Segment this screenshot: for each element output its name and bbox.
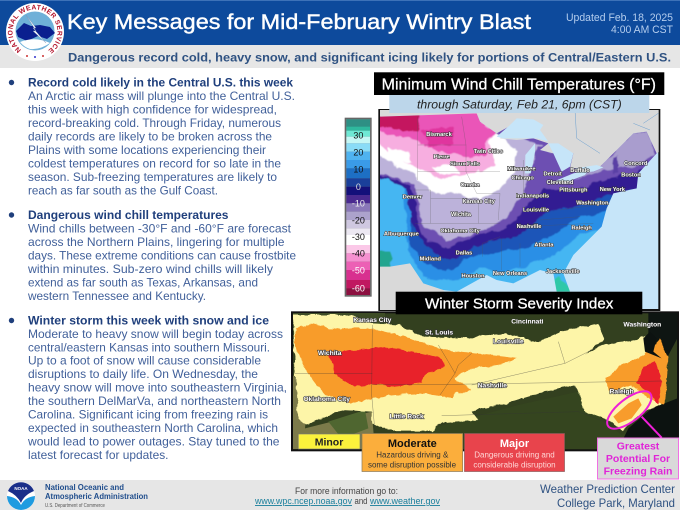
callout: greatest potential for freezing rain: Greatest — [617, 440, 660, 452]
city labels: Little Rock — [390, 413, 424, 420]
city labels: Wichita — [318, 350, 342, 357]
wind chill colour legend: -40 — [352, 249, 365, 259]
NOAA name — [45, 482, 148, 509]
more information links: For more information go to: — [295, 486, 398, 496]
legend: moderate: some disruption possible — [368, 460, 457, 470]
city labels: Chicago — [512, 176, 534, 182]
wind chill colour legend: -60 — [352, 284, 365, 294]
text block: winter storm: latest forecast for updates. — [28, 448, 168, 462]
city labels: Cleveland — [547, 180, 574, 186]
city labels: Houston — [462, 274, 485, 280]
text block: record cold: reach as far south as the Gulf Coast. — [28, 183, 218, 197]
city labels: New Orleans — [493, 271, 527, 277]
city labels: Wichita — [451, 212, 472, 218]
city labels: Dallas — [456, 251, 472, 257]
mexico land — [380, 264, 444, 310]
city labels: Washington — [623, 322, 661, 329]
legend: moderate — [362, 434, 463, 472]
text block: winter storm: would lead to power outages. Stay tuned to the — [27, 434, 280, 448]
text block: wind chill: across the Northern Plains, lingering for multiple — [28, 235, 285, 249]
city labels: Louisville — [523, 207, 549, 213]
wind chill colour legend: -30 — [352, 232, 365, 242]
text block: wind chill: western Tennessee and Kentucky. — [27, 289, 206, 303]
title: Key Messages for Mid-February Wintry Blast — [67, 11, 531, 34]
city labels: Milwaukee — [507, 166, 535, 172]
text block: winter storm: Winter storm this week with snow and ice — [28, 313, 269, 327]
legend: major: Dangerous driving and — [474, 450, 555, 460]
legend: minor: Minor — [315, 436, 343, 448]
city labels: Boston — [621, 173, 641, 179]
text block: winter storm: Up to a foot of snow will cause considerable — [28, 354, 261, 368]
legend: moderate: Moderate — [388, 438, 437, 450]
text block: winter storm: Moderate to heavy snow will begin today across — [28, 327, 283, 341]
NOAA name: National Oceanic and — [45, 482, 124, 492]
icon: NOAA logo — [7, 482, 35, 510]
subtitle band — [0, 45, 680, 68]
city labels: Louisville — [493, 339, 524, 346]
city labels: Midland — [420, 257, 442, 263]
wind chill colour legend: 10 — [353, 165, 363, 175]
text block: wind chill: days. These extreme conditions can cause frostbite — [28, 248, 296, 262]
more information links: www.wpc.ncep.noaa.gov — [254, 496, 352, 506]
text block: record cold — [9, 76, 295, 197]
city labels: Raleigh — [571, 225, 592, 231]
city labels: New York — [600, 187, 626, 193]
major severity area — [328, 347, 662, 405]
text block: record cold: this week with high confidence for widespread, — [28, 103, 277, 117]
terrain — [293, 313, 385, 335]
canada land — [379, 110, 659, 168]
text block: winter storm — [9, 313, 287, 462]
NOAA name: U.S. Department of Commerce — [45, 503, 105, 509]
legend: major: Major — [500, 438, 530, 450]
city labels: Nashville — [517, 224, 541, 230]
wind chill colour legend — [345, 118, 371, 296]
legend: moderate: Hazardous driving & — [376, 450, 449, 460]
temperature bands — [380, 114, 656, 292]
legend: major — [464, 434, 564, 472]
text block: winter storm: heavy snow will move into southeastern Virginia, — [28, 381, 287, 395]
legend: minor — [298, 434, 360, 449]
wind chill map — [373, 110, 667, 310]
callout: greatest potential for freezing rain: Potential For — [606, 453, 670, 465]
text block: wind chill: extend as far south as Texas, Arkansas, and — [28, 276, 258, 290]
text block: record cold: season. Sub-freezing temperatures are likely to — [28, 170, 277, 184]
update time: 4:00 AM CST — [611, 24, 673, 36]
callout: greatest potential for freezing rain: Freezing Rain — [604, 466, 672, 478]
city labels: Detroit — [544, 172, 562, 178]
NOAA name: Atmospheric Administration — [45, 491, 148, 501]
text block: record cold: record-breaking cold. Through Friday, numerous — [28, 116, 281, 130]
city labels: Oklahoma City — [303, 396, 350, 403]
city labels — [303, 317, 661, 420]
subtitle band: Dangerous record cold, heavy snow, and significant icing likely for portions of Central/Eastern U.S. — [68, 50, 671, 64]
text block: wind chill: within minutes. Sub-zero wind chills will likely — [27, 262, 273, 276]
office name: Weather Prediction Center — [540, 482, 675, 496]
city labels: Jacksonville — [546, 269, 579, 275]
text block: wind chill: Wind chills between -30°F and -60°F are forecast — [28, 222, 292, 236]
chesapeake bay — [643, 332, 662, 358]
city labels: Twin Cities — [474, 149, 503, 155]
city labels: Denver — [403, 195, 423, 201]
more information links: www.weather.gov — [369, 496, 440, 506]
wind chill map subtitle: through Saturday, Feb 21, 6pm (CST) — [417, 97, 622, 111]
winter storm severity title: Winter Storm Severity Index — [425, 296, 614, 312]
wind chill colour legend: 30 — [353, 130, 363, 140]
text block: record cold: daily records are likely to be broken across the — [28, 130, 272, 144]
text block: winter storm: Carolina. Significant icing from freezing rain is — [28, 408, 268, 422]
winter storm severity title — [396, 292, 642, 314]
wind chill map title — [374, 72, 664, 95]
city labels: Oklahoma City — [440, 229, 481, 235]
minor severity area — [293, 315, 663, 432]
city labels: Concord — [624, 161, 648, 167]
city labels: Atlanta — [534, 243, 554, 249]
icon: NOAA logo: NOAA — [14, 486, 28, 491]
city labels: Kansas City — [353, 317, 392, 324]
more information links — [254, 486, 440, 506]
wind chill colour legend: 20 — [353, 147, 363, 157]
text block: record cold: Record cold likely in the Central U.S. this week — [28, 76, 293, 90]
text block: record cold: coldest temperatures on record for so late in the — [28, 156, 281, 170]
office name: College Park, Maryland — [557, 496, 675, 510]
city labels: Bismarck — [426, 132, 453, 138]
city labels: St. Louis — [425, 330, 453, 337]
update time: Updated Feb. 18, 2025 — [566, 12, 673, 24]
text block: winter storm: central/eastern Kansas into southern Missouri. — [28, 340, 270, 354]
text block: winter storm: the southern DelMarVa, and northeastern North — [28, 394, 281, 408]
state boundaries — [413, 117, 607, 270]
winter storm severity map — [292, 312, 678, 450]
city labels: Raleigh — [610, 389, 634, 396]
text block: record cold: An Arctic air mass will plunge into the Central U.S. — [28, 89, 295, 103]
wind chill colour legend: -50 — [352, 265, 365, 275]
callout: greatest potential for freezing rain — [598, 438, 678, 479]
city labels: Sioux Falls — [450, 162, 480, 168]
header banner — [0, 0, 680, 45]
wind chill colour legend: 0 — [356, 182, 361, 192]
text block: wind chill: Dangerous wind chill temperatures — [28, 208, 229, 222]
text block: winter storm: disruptions to daily life. On Wednesday, the — [28, 367, 258, 381]
wind chill colour legend: -10 — [352, 199, 365, 209]
freezing rain orange area — [613, 398, 642, 423]
footer — [0, 480, 680, 510]
city labels — [384, 132, 648, 280]
city labels: Kansas City — [462, 199, 496, 205]
city labels: Pierre — [434, 155, 450, 161]
icon: National Weather Service logo: NATIONAL WEATHER SERVICE — [8, 4, 62, 54]
text block: winter storm: expected in southeastern North Carolina, which — [28, 421, 278, 435]
freezing rain ellipse and pointer — [601, 385, 662, 438]
text block: wind chill — [9, 208, 296, 303]
more information links: and — [354, 496, 368, 506]
city labels: Pittsburgh — [559, 188, 588, 194]
moderate severity area — [295, 323, 668, 405]
state boundaries — [295, 325, 662, 432]
wind chill colour legend: -20 — [352, 215, 365, 225]
city labels: Albuquerque — [384, 231, 419, 237]
great lakes — [497, 118, 548, 142]
update time — [566, 12, 673, 36]
text block: record cold: Plains with some locations experiencing their — [28, 143, 266, 157]
city labels: Cincinnati — [511, 319, 544, 326]
city labels: Buffalo — [570, 168, 590, 174]
city labels: Omaha — [460, 182, 480, 188]
wind chill map subtitle — [389, 95, 649, 113]
city labels: Nashville — [478, 383, 507, 390]
city labels: Indianapolis — [516, 194, 549, 200]
city labels: Washington — [576, 201, 609, 207]
office name — [540, 482, 675, 510]
wind chill map title: Minimum Wind Chill Temperatures (°F) — [382, 76, 656, 93]
legend: major: considerable disruption — [473, 460, 556, 470]
